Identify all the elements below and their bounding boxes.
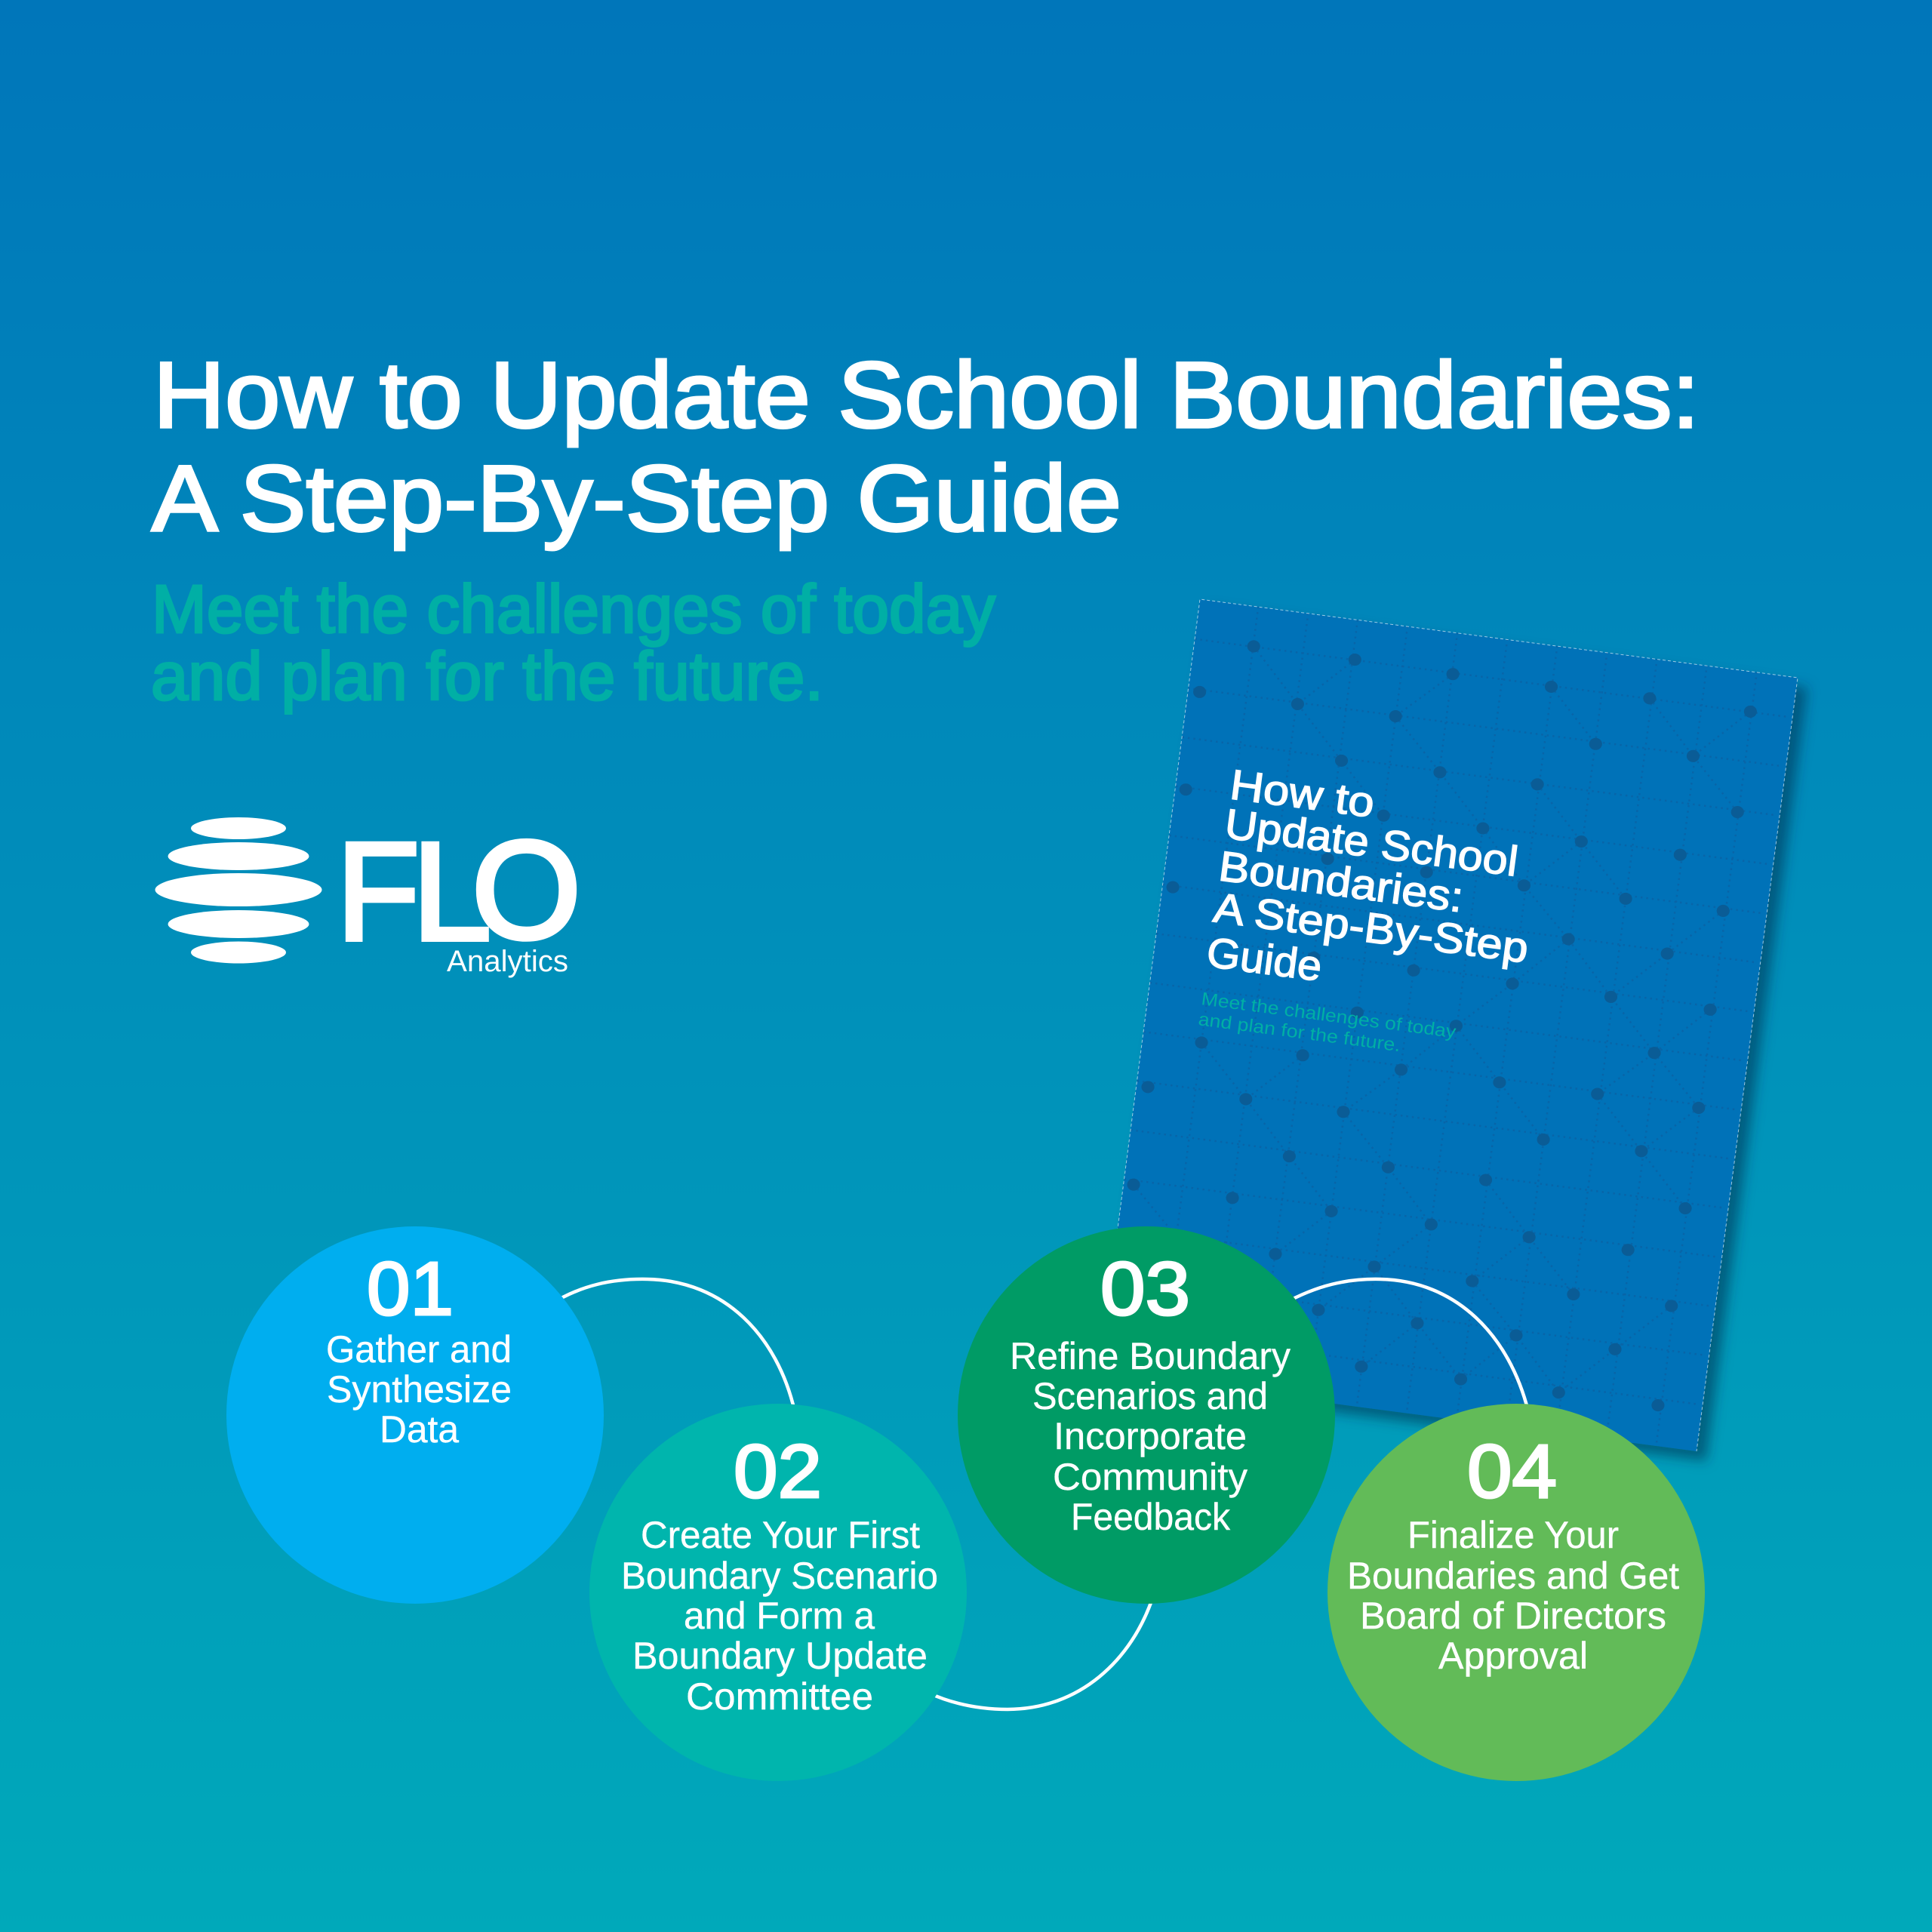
- step 01 text: [326, 1328, 512, 1451]
- step 02 text: Committee: [686, 1675, 873, 1718]
- booklet title: A Step-By-Step: [1211, 883, 1531, 972]
- step 03 text: Refine Boundary: [1010, 1335, 1291, 1377]
- booklet subtitle: [1197, 989, 1457, 1056]
- step 01 text: Gather and: [326, 1328, 512, 1371]
- circle 03: [958, 1226, 1335, 1604]
- logo: FLO Analytics: [155, 813, 581, 978]
- icon: stacked ellipses globe: [155, 817, 321, 963]
- number 01: 01: [367, 1247, 454, 1331]
- step 03 text: [1010, 1335, 1291, 1538]
- booklet subtitle: and plan for the future.: [1197, 1009, 1401, 1056]
- booklet title: [1204, 760, 1531, 990]
- step 04 text: Finalize Your: [1407, 1514, 1619, 1556]
- logo wordmark: O: [472, 813, 581, 968]
- circle 02: [589, 1404, 967, 1781]
- booklet subtitle: Meet the challenges of today: [1200, 989, 1457, 1042]
- subtitle: Meet the challenges of today: [152, 572, 995, 648]
- logo wordmark: Analytics: [447, 945, 568, 978]
- title: How to Update School Boundaries:: [153, 343, 1700, 448]
- circle 04: [1327, 1404, 1705, 1781]
- subtitle: [151, 572, 995, 715]
- step 02 text: Create Your First: [641, 1514, 920, 1556]
- number 03: 03: [1100, 1247, 1190, 1331]
- step 02 text: and Form a: [684, 1595, 875, 1637]
- step 03 text: Feedback: [1071, 1496, 1231, 1538]
- booklet title: How to: [1227, 760, 1377, 826]
- number 02: 02: [734, 1429, 822, 1514]
- step 02 text: Boundary Update: [632, 1635, 928, 1677]
- step 03: [958, 1226, 1335, 1604]
- subtitle: and plan for the future.: [151, 639, 823, 715]
- logo wordmark: L: [412, 814, 491, 970]
- step 03 text: Community: [1053, 1456, 1247, 1498]
- guide booklet cover: [1099, 599, 1798, 1451]
- step 04 text: Board of Directors: [1360, 1595, 1666, 1637]
- step 01: [226, 1226, 604, 1604]
- step 04 text: Approval: [1438, 1635, 1588, 1677]
- step 01 text: Data: [380, 1408, 459, 1451]
- logo wordmark: F: [337, 814, 420, 970]
- logo wordmark: [337, 813, 581, 978]
- booklet title: Boundaries:: [1216, 841, 1466, 921]
- step 04: [1327, 1404, 1705, 1781]
- circle 01: [226, 1226, 604, 1604]
- step 03 text: Incorporate: [1054, 1415, 1247, 1457]
- step 04 text: Boundaries and Get: [1347, 1555, 1679, 1597]
- booklet page: [1099, 599, 1798, 1451]
- step 02: [589, 1404, 967, 1781]
- step 02 text: Boundary Scenario: [621, 1555, 938, 1597]
- step 04 text: [1347, 1514, 1679, 1677]
- number 04: 04: [1467, 1429, 1557, 1514]
- booklet title: Update School: [1222, 799, 1521, 885]
- booklet network pattern: [1099, 607, 1787, 1446]
- step 03 text: Scenarios and: [1032, 1375, 1268, 1417]
- title: A Step-By-Step Guide: [152, 447, 1121, 551]
- booklet title: Guide: [1204, 928, 1324, 990]
- title: [152, 343, 1700, 551]
- connector arcs between steps: [551, 1279, 1528, 1709]
- step 02 text: [621, 1514, 938, 1718]
- step 01 text: Synthesize: [327, 1368, 512, 1411]
